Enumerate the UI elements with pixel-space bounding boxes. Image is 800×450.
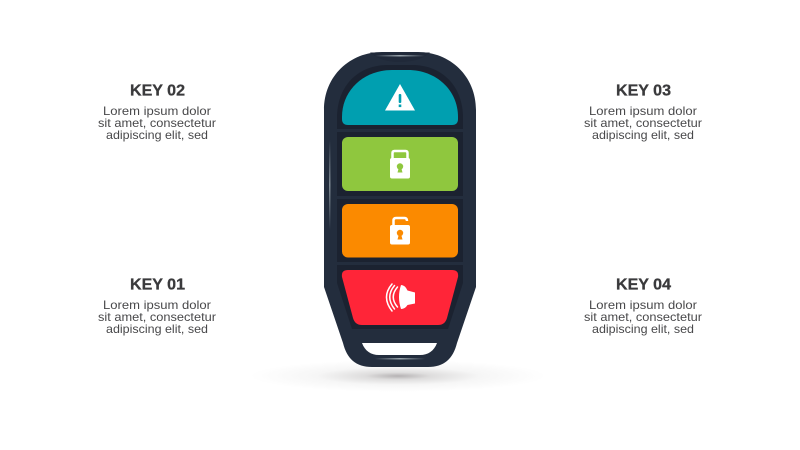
text block: KEY 04 <box>584 276 702 336</box>
text block: KEY 04: KEY 04 <box>616 276 671 294</box>
button: unlock <box>342 204 458 258</box>
text block: KEY 03: Lorem ipsum dolor <box>589 104 697 118</box>
text block: KEY 03: adipiscing elit, sed <box>592 128 694 142</box>
text block: KEY 01: KEY 01 <box>130 276 185 294</box>
text block: KEY 02 <box>98 82 216 142</box>
button: lock <box>342 137 458 191</box>
icon: speaker with sound waves <box>386 284 415 311</box>
button: alarm <box>342 270 458 325</box>
icon: warning triangle <box>385 84 415 110</box>
text block: KEY 04: adipiscing elit, sed <box>592 322 694 336</box>
text block: KEY 02: sit amet, consectetur <box>98 116 216 130</box>
inner recess <box>337 65 463 329</box>
text block: KEY 01: Lorem ipsum dolor <box>103 298 211 312</box>
highlights <box>329 55 425 360</box>
key fob <box>324 52 476 367</box>
text block: KEY 03: KEY 03 <box>616 82 671 100</box>
text block: KEY 02: adipiscing elit, sed <box>106 128 208 142</box>
text block: KEY 01 <box>98 276 216 336</box>
button: alert <box>342 70 458 125</box>
top notch <box>370 52 430 62</box>
text block: KEY 04: Lorem ipsum dolor <box>589 298 697 312</box>
shadow under key fob <box>250 360 546 392</box>
text block: KEY 04: sit amet, consectetur <box>584 310 702 324</box>
icon: open padlock <box>390 218 410 244</box>
recess separators <box>337 129 463 265</box>
fob body <box>324 52 476 367</box>
icon: closed padlock <box>390 151 410 178</box>
text block: KEY 03: sit amet, consectetur <box>584 116 702 130</box>
text block: KEY 02: KEY 02 <box>130 82 185 100</box>
text block: KEY 01: adipiscing elit, sed <box>106 322 208 336</box>
text block: KEY 03 <box>584 82 702 142</box>
text block: KEY 01: sit amet, consectetur <box>98 310 216 324</box>
text block: KEY 02: Lorem ipsum dolor <box>103 104 211 118</box>
